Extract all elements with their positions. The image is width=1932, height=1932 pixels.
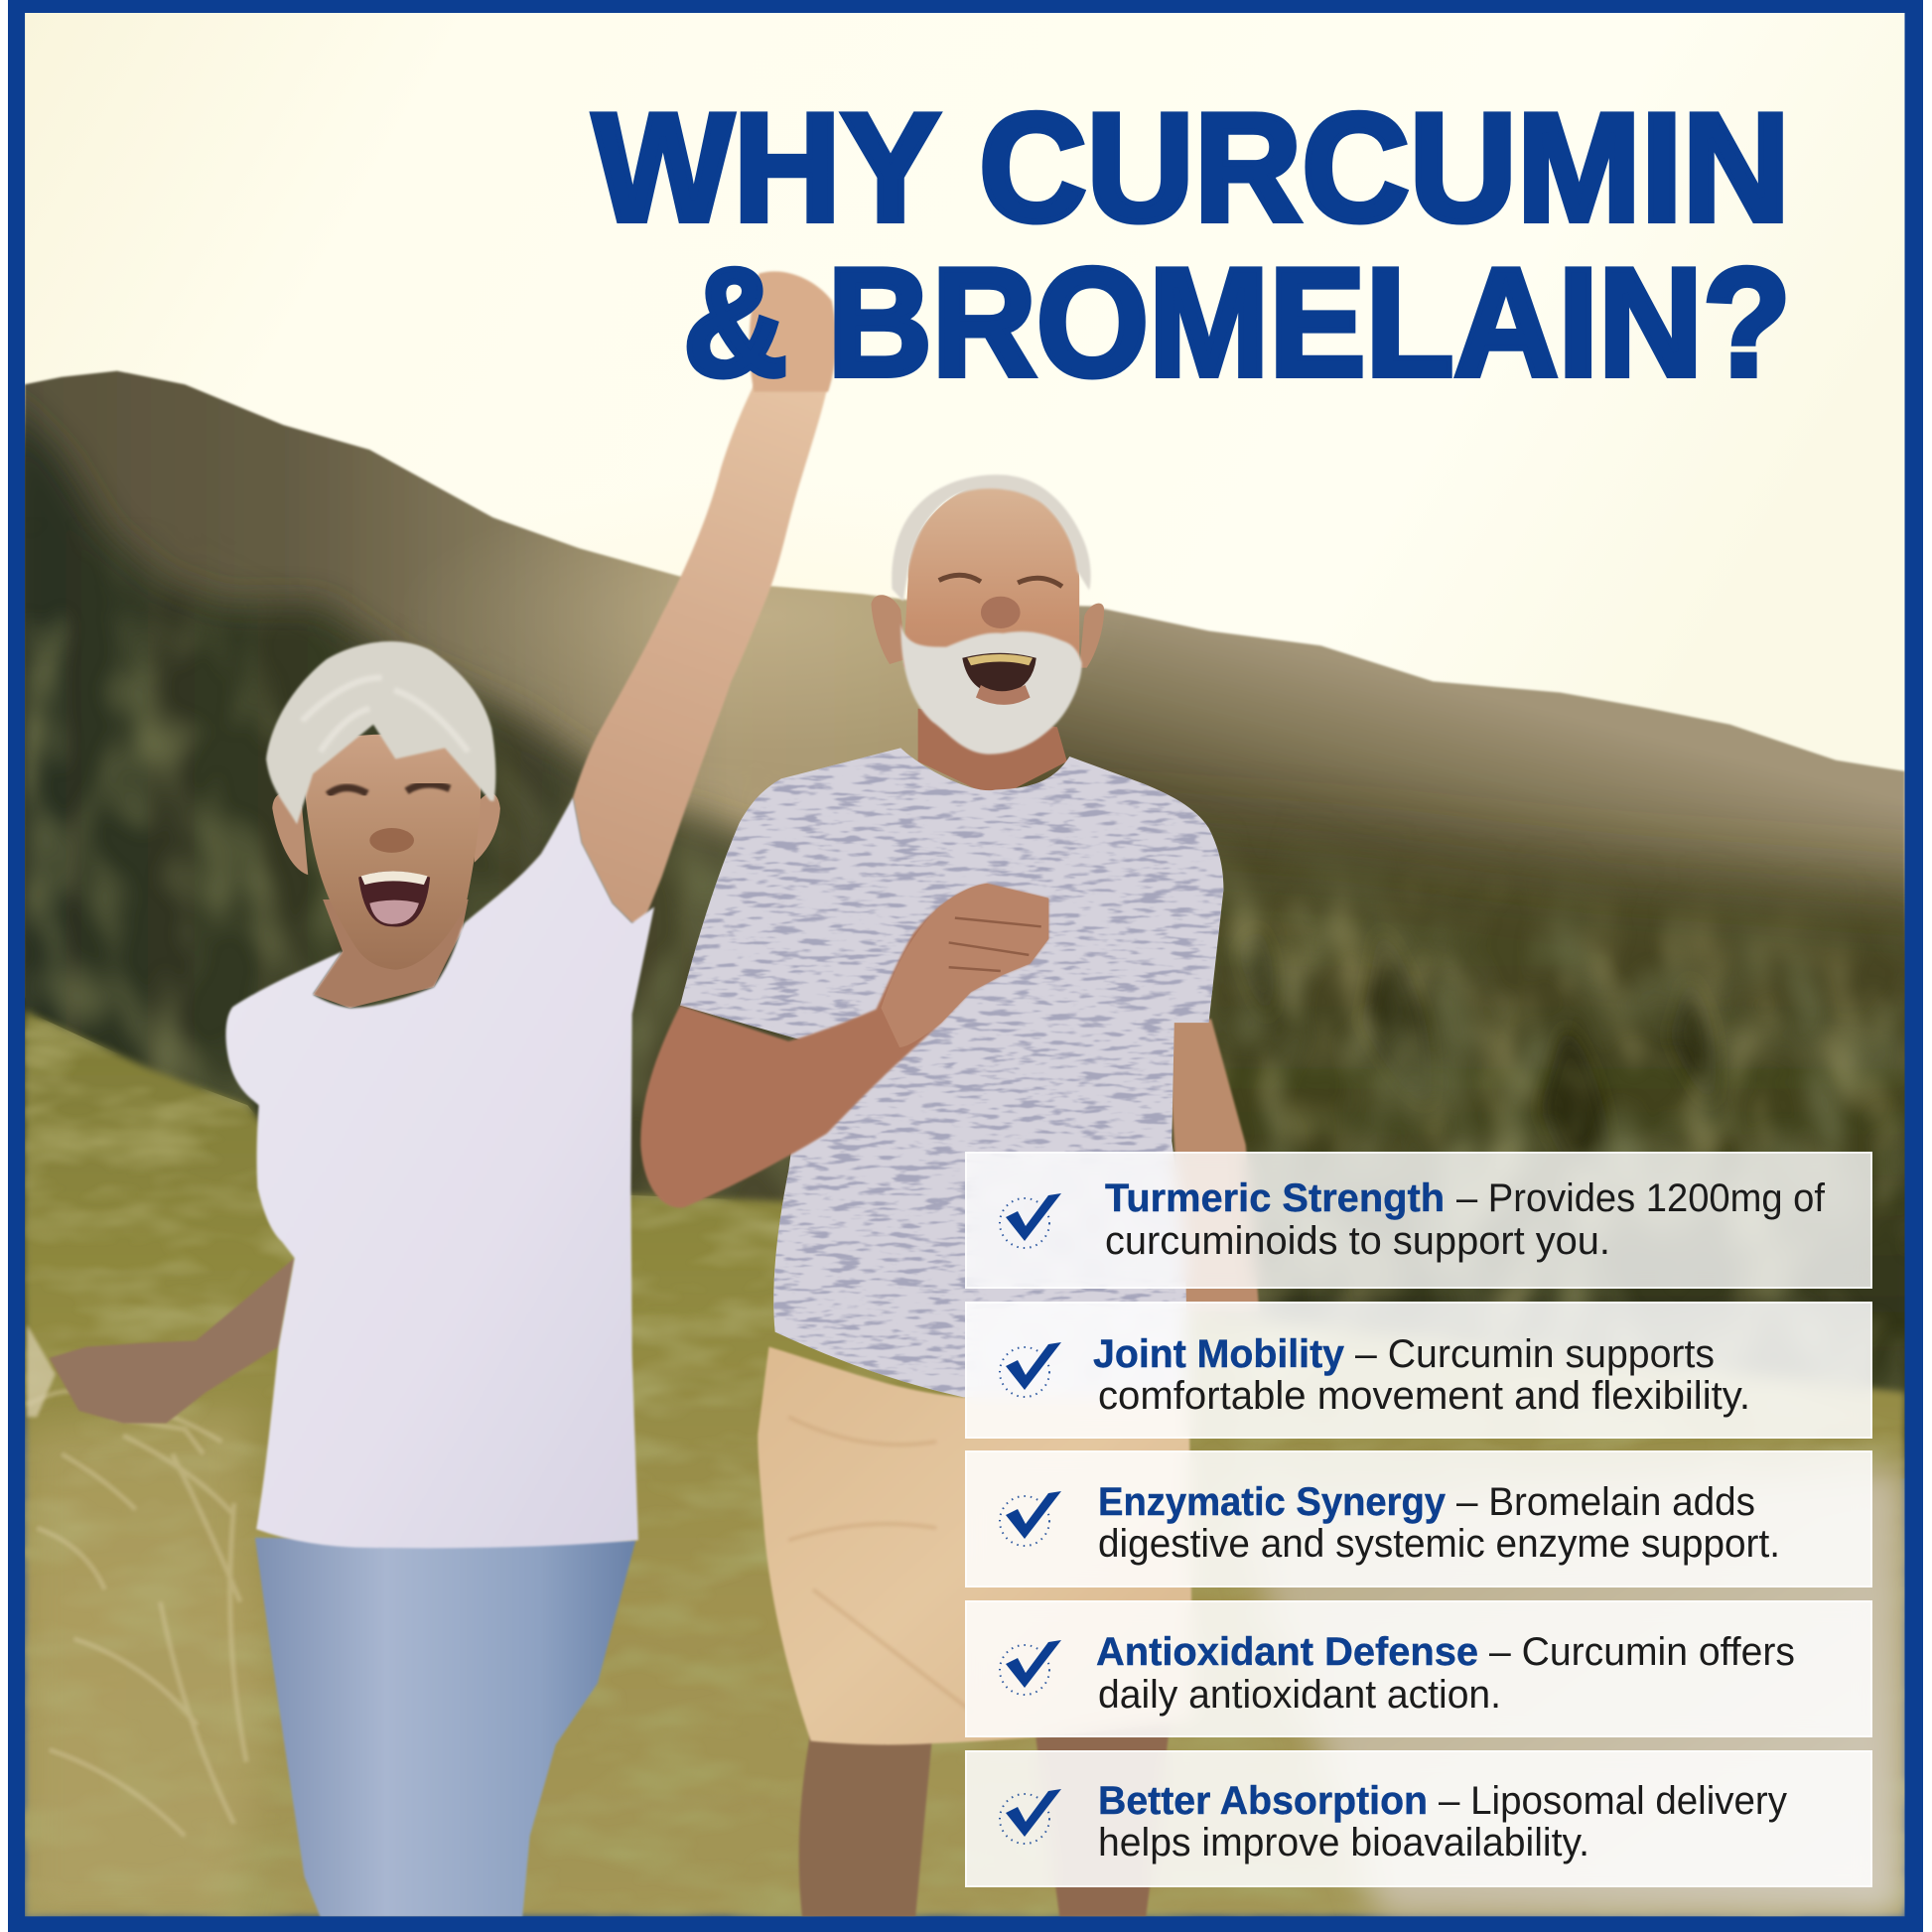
benefit heading: Better Absorption [1098,1779,1428,1823]
mountain left slope [25,369,975,1005]
sky [25,12,1906,998]
man's white hair [892,475,1091,602]
benefit text line 2: digestive and systemic enzyme support. [1098,1522,1780,1566]
benefit card: Enzymatic Synergy [965,1450,1872,1587]
benefit text line 1: – Provides 1200mg of [1456,1176,1826,1220]
check icon [1000,1789,1061,1844]
woman's hair highlights [302,678,469,752]
forest tree texture [25,616,1904,1405]
neck and chest [313,899,469,1008]
woman's ears [272,793,500,875]
benefit heading: Turmeric Strength [1105,1176,1445,1220]
grass texture [25,998,1906,1922]
man's near arm [640,884,1048,1207]
title line 1: WHY CURCUMIN [593,81,1790,253]
check icon [1000,1640,1061,1695]
man's far leg [1035,1719,1171,1917]
woman's open mouth [358,871,430,927]
grey t-shirt [671,740,1226,1405]
benefit heading: Enzymatic Synergy [1098,1480,1446,1524]
check icon [1000,1491,1061,1546]
woman's eyes [328,784,450,795]
person: woman [50,271,836,1917]
man's hand [881,884,1048,1047]
left forest mass [25,390,798,1431]
benefit text line 2: curcuminoids to support you. [1105,1219,1610,1263]
person: man [640,475,1259,1917]
check icon [1000,1342,1061,1397]
sunlit tree texture [1223,896,1904,1360]
benefit card: Turmeric Strength [965,1152,1872,1289]
man's teeth [967,654,1033,665]
woman's nose [369,828,414,853]
raised arm [573,384,828,923]
benefit heading: Joint Mobility [1093,1332,1344,1376]
dark tree shadows [1247,935,1714,1152]
man's open mouth [962,653,1036,695]
pale grass stalks [27,1391,246,1836]
man's finger lines [949,918,1041,971]
neck [918,709,1067,798]
benefit card: Antioxidant Defense [965,1600,1872,1737]
benefit text line 2: helps improve bioavailability. [1098,1821,1589,1864]
benefit text line 2: comfortable movement and flexibility. [1098,1374,1750,1418]
man's lower lip [976,685,1031,705]
woman's tongue [369,900,419,924]
benefit text line 1: – Liposomal delivery [1439,1779,1787,1823]
forest textures faded toward the ridge [25,616,1904,1405]
man's eyes [939,575,1062,587]
mountain right slope [998,604,1905,1478]
pale grass haze at lower left [25,1405,265,1917]
title line 2: & BROMELAIN? [683,236,1791,408]
shorts [758,1347,1192,1744]
benefit text line 1: – Bromelain adds [1456,1480,1755,1524]
man's ears [871,595,1104,668]
benefit card: Joint Mobility [965,1302,1872,1439]
jeans [255,1538,635,1917]
man's far arm [1172,1017,1259,1312]
woman's lower arm and hand [50,1258,295,1423]
check icon [1000,1193,1061,1248]
path in the grass [1232,1466,1905,1917]
benefit heading: Antioxidant Defense [1096,1630,1478,1674]
benefit text line 2: daily antioxidant action. [1098,1673,1501,1717]
title [593,81,1791,408]
pale bushes beside the woman's hand [27,1324,56,1417]
man's nose [981,597,1021,628]
grass hillside [25,1011,1905,1917]
man's white beard [900,623,1082,755]
white t-shirt [225,797,654,1548]
benefit text line 1: – Curcumin offers [1489,1630,1795,1674]
benefit text line 1: – Curcumin supports [1355,1332,1715,1376]
shorts folds [788,1417,973,1713]
sun haze [508,555,907,693]
man's near leg [799,1731,933,1917]
woman's face [302,735,481,970]
benefit card: Better Absorption [965,1750,1872,1887]
raised fist [750,271,836,392]
right forest mass [1217,818,1904,1478]
woman's teeth [361,871,428,885]
man's face [903,483,1079,712]
forest layers clipped to mountain [0,394,1932,1503]
woman's white hair [266,641,495,824]
